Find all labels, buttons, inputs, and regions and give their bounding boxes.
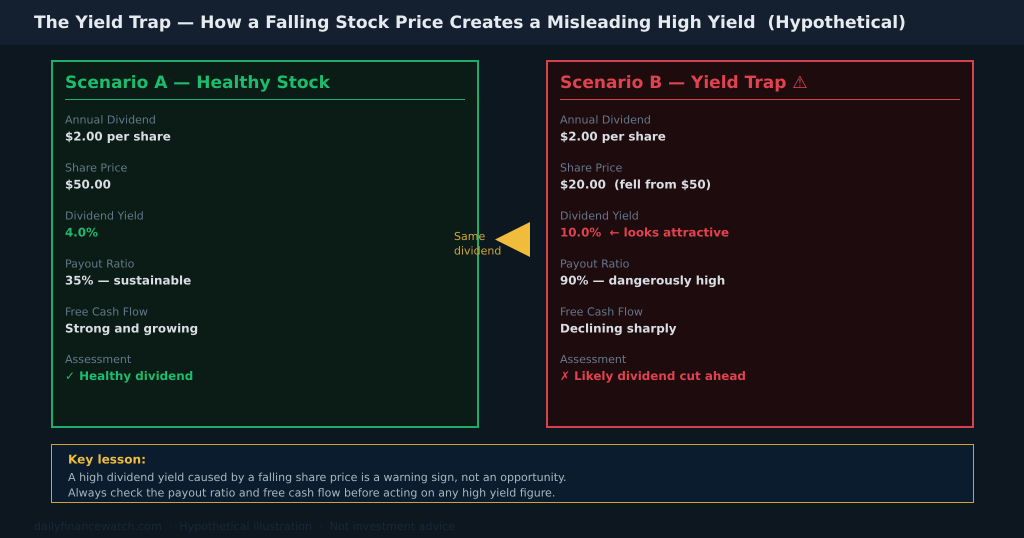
metric: payout ratio: Payout Ratio <box>65 258 135 270</box>
metric: assessment <box>65 353 193 383</box>
metric: annual dividend: Annual Dividend <box>65 114 156 126</box>
metric: payout ratio <box>560 258 725 288</box>
metric: assessment: ✓ Healthy dividend <box>65 369 193 383</box>
metric: assessment: ✗ Likely dividend cut ahead <box>560 369 746 383</box>
metric: share price <box>65 162 128 192</box>
title: The Yield Trap — How a Falling Stock Price Creates a Misleading High Yield (Hypothetical) <box>34 13 906 33</box>
metric: payout ratio: 35% — sustainable <box>65 274 191 288</box>
arrow: same dividend <box>454 222 530 258</box>
metric: assessment: Assessment <box>560 353 627 366</box>
metric: payout ratio <box>65 258 191 288</box>
callout: key lesson <box>52 444 974 502</box>
panel: Scenario B <box>547 61 973 427</box>
panel: Scenario A <box>52 61 478 427</box>
metric: free cash flow <box>65 305 198 335</box>
arrow label: Same <box>454 230 485 243</box>
arrow label: dividend <box>454 244 501 258</box>
metric: free cash flow: Declining sharply <box>560 321 677 335</box>
metric: share price: $20.00 (fell from $50) <box>560 178 711 192</box>
metric: free cash flow: Strong and growing <box>65 321 198 335</box>
metric: share price: Share Price <box>65 162 128 174</box>
metric: dividend yield: Dividend Yield <box>65 210 144 222</box>
callout heading: Key lesson: <box>68 453 146 467</box>
metric: annual dividend: $2.00 per share <box>560 130 666 144</box>
metric: annual dividend: $2.00 per share <box>65 130 171 144</box>
heading: Scenario A: Scenario A — Healthy Stock <box>65 73 331 93</box>
metric: dividend yield: 4.0% <box>65 226 98 240</box>
metric: dividend yield: Dividend Yield <box>560 210 639 222</box>
metric: assessment: Assessment <box>65 353 132 366</box>
metric: dividend yield: 10.0% ← looks attractive <box>560 226 729 240</box>
metric: payout ratio: 90% — dangerously high <box>560 274 725 288</box>
metric: assessment <box>560 353 746 383</box>
metric: dividend yield <box>65 210 144 240</box>
footer: dailyfinancewatch.com · Hypothetical illustration · Not investment advice <box>34 520 455 533</box>
metric: free cash flow <box>560 305 677 335</box>
metric: share price: $50.00 <box>65 178 111 192</box>
metric: free cash flow: Free Cash Flow <box>65 305 148 318</box>
metric: dividend yield <box>560 210 729 240</box>
callout text: A high dividend yield caused by a falling share price is a warning sign, not an opportunity. <box>68 471 567 484</box>
metric: annual dividend: Annual Dividend <box>560 114 651 126</box>
metric: annual dividend <box>65 114 171 144</box>
metric: share price: Share Price <box>560 162 623 174</box>
metric: payout ratio: Payout Ratio <box>560 258 630 270</box>
callout text: Always check the payout ratio and free cash flow before acting on any high yield figure. <box>68 486 555 500</box>
metric: share price <box>560 162 711 192</box>
metric: annual dividend <box>560 114 666 144</box>
metric: free cash flow: Free Cash Flow <box>560 305 643 318</box>
heading: Scenario B: Scenario B — Yield Trap ⚠ <box>560 73 808 93</box>
title bar <box>0 0 1024 45</box>
